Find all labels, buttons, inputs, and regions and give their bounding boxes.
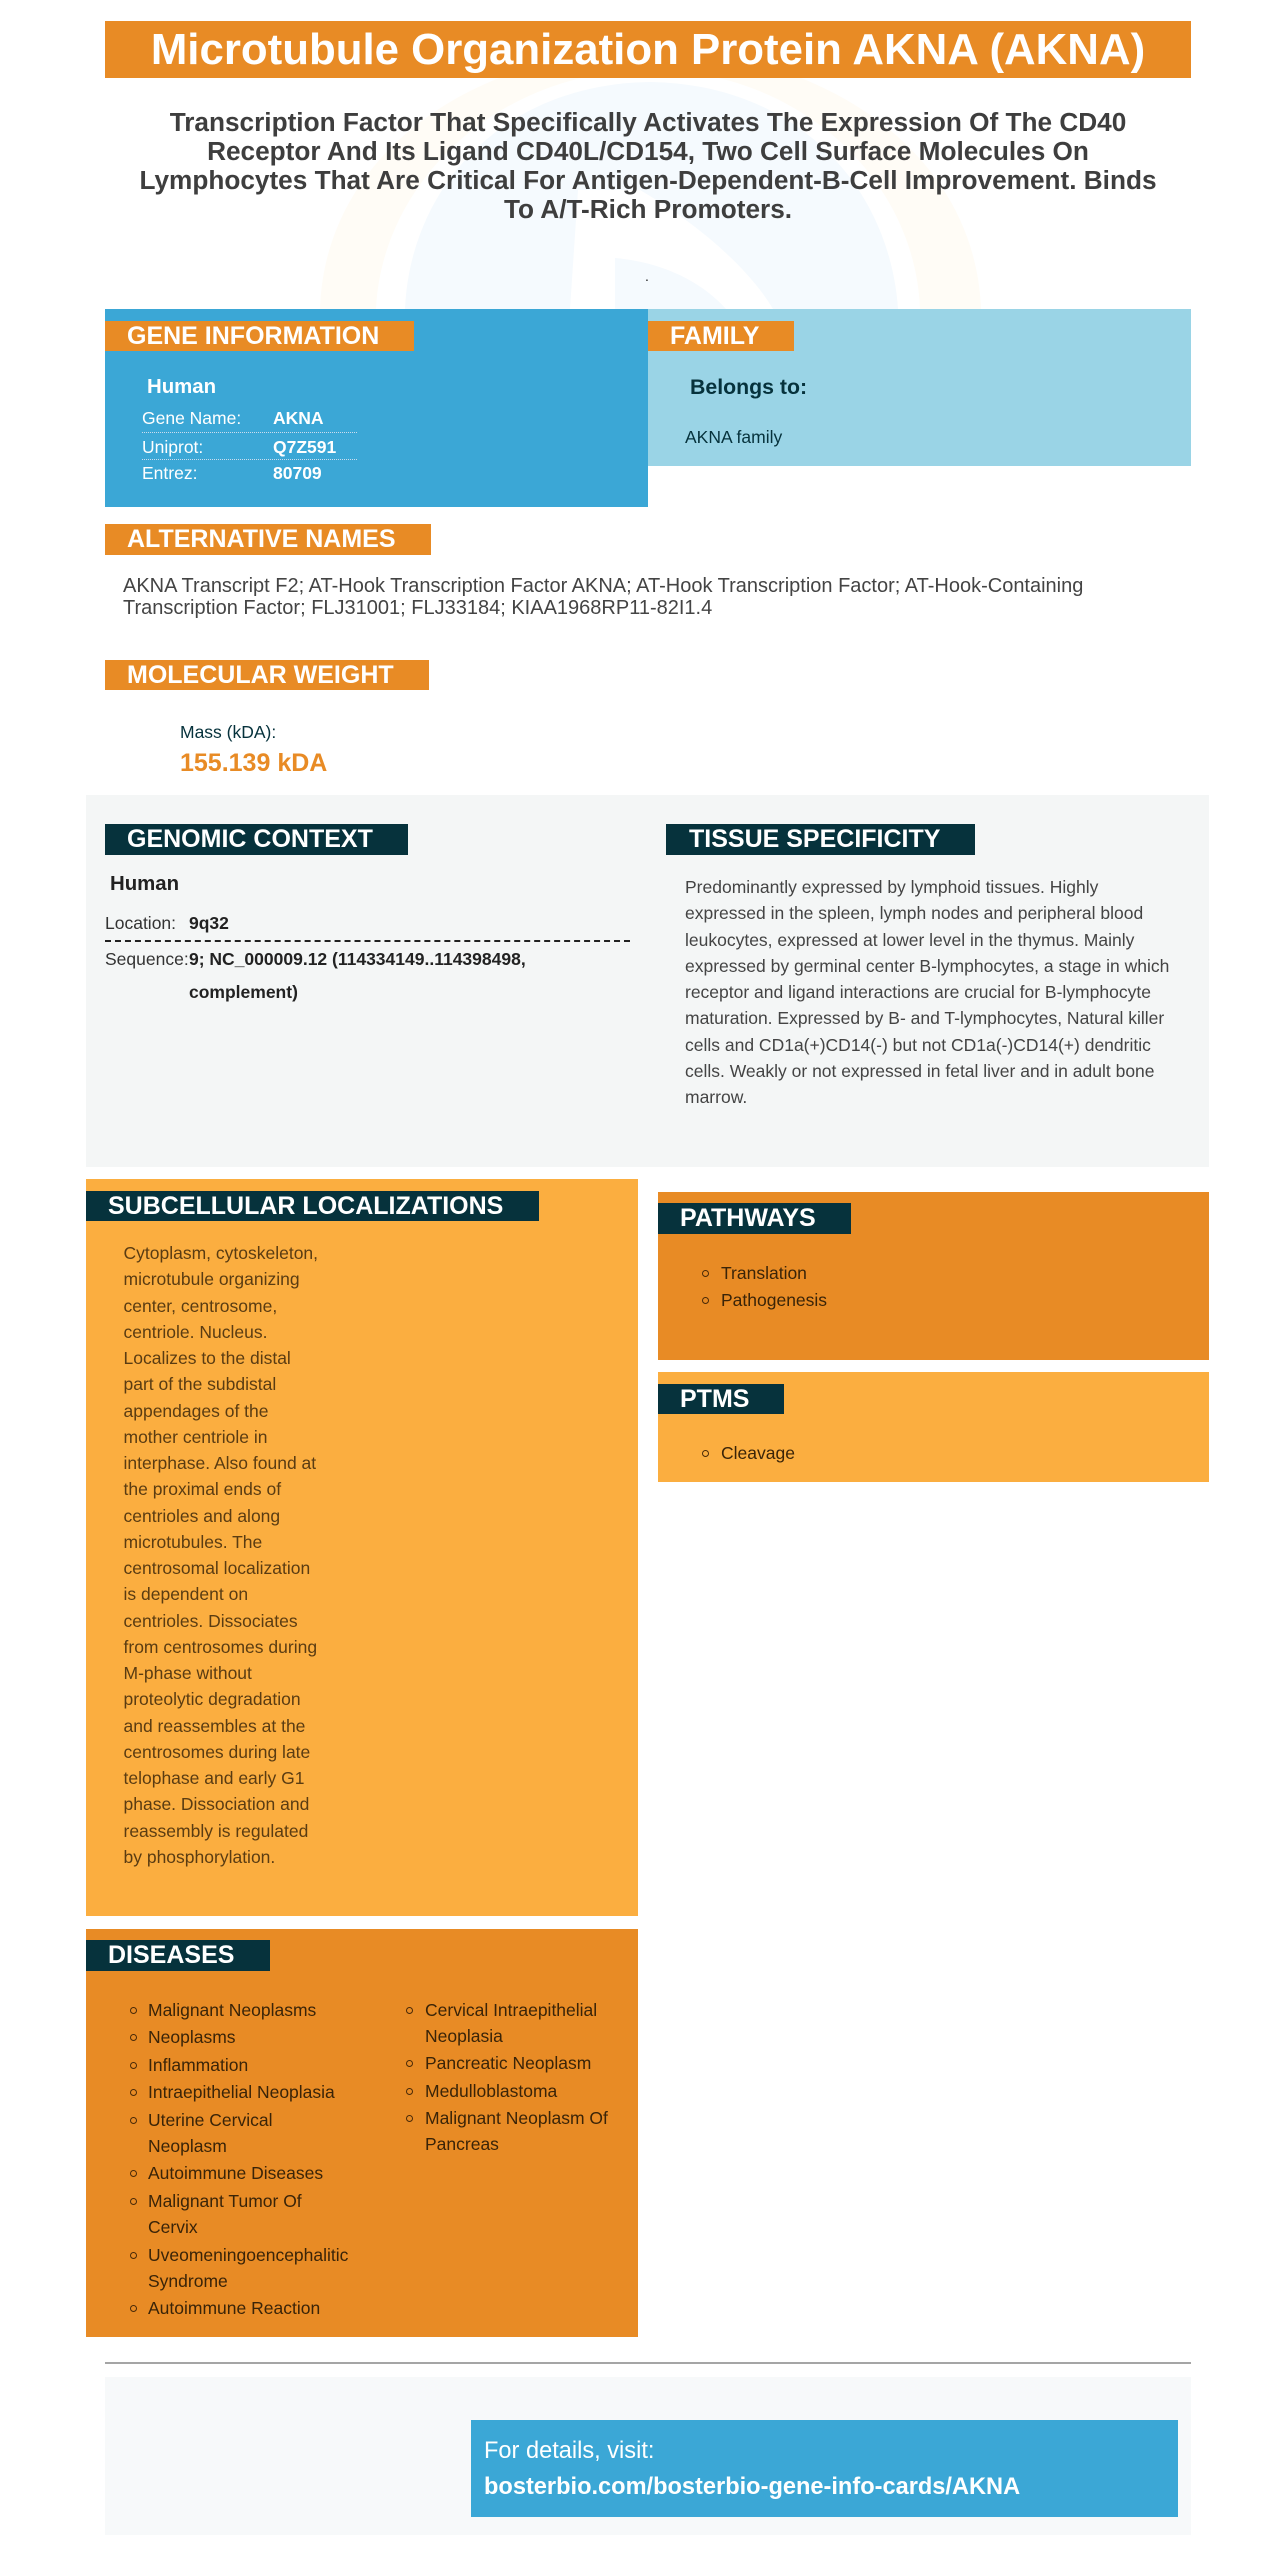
subcellular text: mother centriole in	[124, 1427, 267, 1447]
subcellular text: interphase. Also found at	[124, 1453, 316, 1473]
callout url: bosterbio.com/bosterbio-gene-info-cards/AKNA	[484, 2474, 1020, 2500]
entrez row: 80709	[273, 463, 322, 483]
pathway item: Translation	[721, 1263, 807, 1283]
heading: diseases	[86, 1940, 270, 1971]
disease list column 1: Autoimmune Reaction	[148, 2298, 320, 2318]
uniprot row: Uniprot:	[142, 437, 203, 457]
tissue specificity text: expressed in the spleen, lymph nodes and peripheral blood	[685, 903, 1143, 923]
mass label: Mass (kDA):	[180, 722, 276, 742]
subtitle: Lymphocytes That Are Critical For Antigen-Dependent-B-Cell Improvement. Binds	[139, 165, 1157, 195]
panel: pathways	[658, 1192, 1209, 1360]
ptm item: Cleavage	[721, 1443, 795, 1463]
subcellular text: centrioles and along	[124, 1506, 280, 1526]
heading: ptms: PTMS	[680, 1385, 749, 1413]
disease list column 2: Medulloblastoma	[425, 2081, 557, 2101]
heading: diseases: DISEASES	[108, 1941, 234, 1969]
panel: ptms	[658, 1372, 1209, 1482]
heading: family: FAMILY	[670, 322, 759, 350]
panel: genomic context and tissue specificity	[86, 795, 1209, 1167]
species: Human	[110, 873, 179, 895]
entrez row	[142, 463, 322, 483]
location row	[105, 913, 229, 933]
subcellular text: part of the subdistal	[124, 1374, 276, 1394]
subtitle: Receptor And Its Ligand CD40L/CD154, Two Cell Surface Molecules On	[207, 136, 1089, 166]
panel: footer	[105, 2377, 1191, 2535]
subcellular text: reassembly is regulated	[124, 1820, 308, 1840]
tissue specificity text	[685, 877, 1169, 1107]
gene name row: Gene Name:	[142, 408, 241, 428]
heading: pathways	[658, 1203, 851, 1234]
subcellular text: is dependent on	[124, 1584, 248, 1604]
tissue specificity text: cells and CD1a(+)CD14(-) but not CD1a(-)CD14(+) dendritic	[685, 1035, 1151, 1055]
heading: molecular weight: MOLECULAR WEIGHT	[127, 661, 394, 689]
panel: genomic context and tissue specificity: 9q32	[189, 913, 229, 933]
subcellular text: and reassembles at the	[124, 1716, 305, 1736]
heading: genomic context: GENOMIC CONTEXT	[127, 825, 373, 853]
sequence row: Sequence:	[105, 949, 189, 969]
disease list column 2: Cervical Intraepithelial	[425, 2000, 597, 2020]
disease list column 1: Neoplasm	[148, 2136, 227, 2156]
dashed line	[105, 940, 630, 942]
belongs to: Belongs to:	[690, 375, 807, 399]
subcellular text: centrosomes during late	[124, 1742, 310, 1762]
subcellular text: center, centrosome,	[124, 1296, 277, 1316]
heading: family	[648, 321, 794, 351]
gene name row: AKNA	[273, 408, 324, 428]
tissue specificity text: cells. Weakly or not expressed in fetal liver and in adult bone	[685, 1061, 1155, 1081]
subcellular text: microtubules. The	[124, 1532, 262, 1552]
dot: .	[645, 268, 649, 284]
subtitle: To A/T-Rich Promoters.	[504, 194, 792, 224]
bullet	[702, 1270, 709, 1277]
subtitle: Transcription Factor That Specifically Activates The Expression Of The CD40	[170, 107, 1126, 137]
subcellular text: microtubule organizing	[124, 1269, 300, 1289]
panel: family	[648, 309, 1191, 466]
subcellular text: M-phase without	[124, 1663, 252, 1683]
background watermark	[320, 78, 981, 309]
sequence row	[105, 949, 526, 1002]
disease list column 1: Neoplasms	[148, 2027, 236, 2047]
subcellular text: centriole. Nucleus.	[124, 1322, 267, 1342]
tissue specificity text: receptor and ligand interactions are crucial for B-lymphocyte	[685, 982, 1151, 1002]
bullet	[702, 1450, 709, 1457]
subcellular text: proteolytic degradation	[124, 1689, 301, 1709]
panel: genomic context and tissue specificity: complement)	[189, 982, 298, 1002]
family value: AKNA family	[685, 427, 782, 447]
subtitle	[139, 107, 1157, 224]
subcellular text: appendages of the	[124, 1400, 268, 1420]
tissue specificity text: expressed by germinal center B-lymphocytes, a stage in which	[685, 956, 1169, 976]
disease list column 2: Malignant Neoplasm Of	[425, 2108, 608, 2128]
disease list column 1	[130, 2000, 348, 2318]
disease list column 1: Malignant Neoplasms	[148, 2000, 316, 2020]
uniprot row: Q7Z591	[273, 437, 336, 457]
disease list column 1: Intraepithelial Neoplasia	[148, 2082, 335, 2102]
subcellular text	[124, 1243, 318, 1867]
subcellular text: Cytoplasm, cytoskeleton,	[124, 1243, 318, 1263]
disease list column 2: Pancreas	[425, 2134, 499, 2154]
mass value: 155.139 kDA	[180, 749, 327, 777]
pathway item: Pathogenesis	[721, 1290, 827, 1310]
panel: genomic context and tissue specificity: 9; NC_000009.12 (114334149..114398498,	[189, 949, 526, 969]
callout label: For details, visit:	[484, 2438, 654, 2464]
alternative names text: AKNA Transcript F2; AT-Hook Transcription Factor AKNA; AT-Hook Transcription Factor; AT-Hook-Containing	[123, 574, 1083, 596]
tissue specificity text: maturation. Expressed by B- and T-lymphocytes, Natural killer	[685, 1008, 1164, 1028]
tissue specificity text: Predominantly expressed by lymphoid tissues. Highly	[685, 877, 1098, 897]
alternative names text	[123, 574, 1083, 618]
disease list column 1: Uveomeningoencephalitic	[148, 2245, 348, 2265]
title: Microtubule Organization Protein AKNA (AKNA)	[151, 25, 1145, 74]
heading: alternative names: ALTERNATIVE NAMES	[127, 525, 396, 553]
subcellular text: Localizes to the distal	[124, 1348, 291, 1368]
subcellular text: telophase and early G1	[124, 1768, 304, 1788]
species: Human	[147, 376, 216, 398]
gene name row	[142, 406, 357, 433]
panel: subcellular localizations	[86, 1179, 638, 1916]
heading: tissue specificity: TISSUE SPECIFICITY	[689, 825, 940, 853]
disease list column 1: Autoimmune Diseases	[148, 2163, 323, 2183]
subcellular text: from centrosomes during	[124, 1637, 317, 1657]
subcellular text: centrosomal localization	[124, 1558, 310, 1578]
disease list column 1: Uterine Cervical	[148, 2110, 272, 2130]
disease list column 2: Neoplasia	[425, 2026, 503, 2046]
panel: diseases	[86, 1929, 638, 2337]
uniprot row	[142, 433, 357, 460]
disease list column 2	[406, 2000, 608, 2154]
subcellular text: by phosphorylation.	[124, 1847, 275, 1867]
bullet	[702, 1297, 709, 1304]
tissue specificity text: leukocytes, expressed at lower level in the thymus. Mainly	[685, 930, 1134, 950]
heading: gene information: GENE INFORMATION	[127, 322, 379, 350]
subcellular text: phase. Dissociation and	[124, 1794, 309, 1814]
disease list column 2: Pancreatic Neoplasm	[425, 2053, 591, 2073]
entrez row: Entrez:	[142, 463, 197, 483]
heading: pathways: PATHWAYS	[680, 1204, 816, 1232]
details callout	[471, 2420, 1178, 2517]
location row: Location:	[105, 913, 176, 933]
subcellular text: the proximal ends of	[124, 1479, 281, 1499]
disease list column 1: Inflammation	[148, 2055, 248, 2075]
subcellular text: centrioles. Dissociates	[124, 1610, 298, 1630]
disease list column 1: Malignant Tumor Of	[148, 2191, 302, 2211]
tissue specificity text: marrow.	[685, 1087, 747, 1107]
heading: ptms	[658, 1384, 784, 1414]
alternative names text: Transcription Factor; FLJ31001; FLJ33184; KIAA1968RP11-82I1.4	[123, 596, 712, 618]
heading: subcellular localizations: SUBCELLULAR LOCALIZATIONS	[108, 1192, 503, 1220]
panel: gene information	[105, 309, 648, 507]
disease list column 1: Cervix	[148, 2217, 198, 2237]
disease list column 1: Syndrome	[148, 2271, 228, 2291]
